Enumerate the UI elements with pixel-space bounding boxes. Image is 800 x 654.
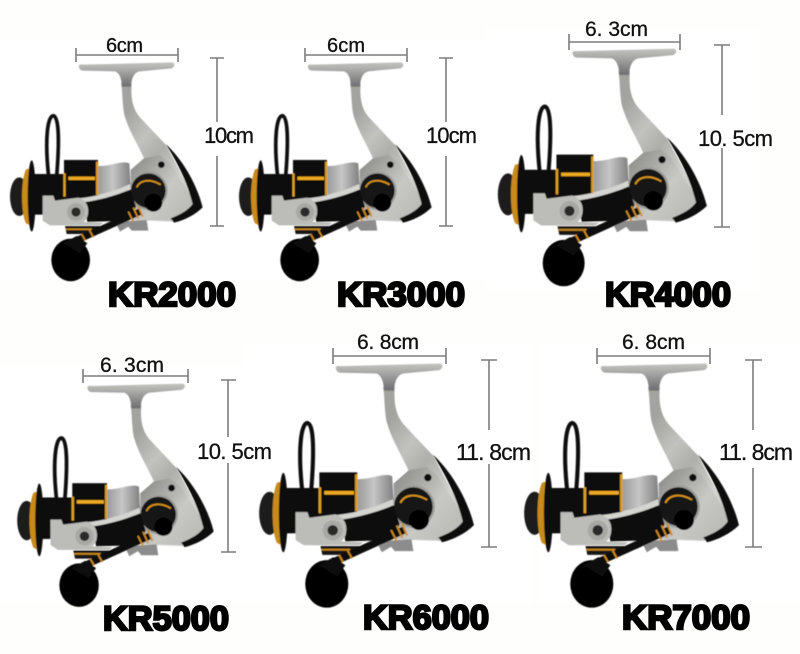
height dimension: KR3000: 10cm — [426, 123, 477, 148]
reel: KR6000 — [259, 363, 474, 608]
width dimension: KR6000: 6. 8cm — [357, 331, 419, 354]
panel: KR5000 — [17, 354, 272, 638]
height dimension: KR7000: 11. 8cm — [719, 439, 793, 465]
height dimension: KR4000: 10. 5cm — [698, 126, 773, 151]
model label: KR4000: KR4000 — [605, 276, 731, 314]
height dimension: KR3000 — [426, 58, 477, 226]
panel: KR6000 — [259, 331, 531, 637]
height dimension: KR5000: 10. 5cm — [197, 439, 272, 464]
model label: KR3000: KR3000 — [337, 276, 465, 314]
model label: KR2000: KR2000 — [108, 276, 236, 314]
model label: KR5000: KR5000 — [103, 600, 229, 638]
model label: KR6000: KR6000 — [363, 599, 489, 637]
height dimension: KR7000 — [719, 360, 793, 547]
panel: KR3000 — [239, 35, 477, 314]
panel: KR2000 — [10, 35, 254, 314]
panel: KR7000 — [524, 331, 793, 637]
width dimension: KR2000 — [76, 35, 178, 62]
width dimension: KR5000 — [83, 354, 188, 383]
height dimension: KR5000 — [197, 380, 272, 552]
height dimension: KR2000: 10cm — [204, 123, 254, 148]
height dimension: KR6000 — [456, 360, 531, 547]
width dimension: KR6000 — [333, 331, 446, 364]
reel: KR2000 — [10, 62, 203, 281]
model label: KR7000: KR7000 — [622, 599, 750, 637]
height dimension: KR6000: 11. 8cm — [456, 439, 531, 465]
width dimension: KR5000: 6. 3cm — [100, 354, 164, 377]
height dimension: KR4000 — [698, 45, 773, 227]
panel: KR4000 — [498, 18, 773, 314]
width dimension: KR3000: 6cm — [327, 35, 365, 57]
width dimension: KR4000: 6. 3cm — [585, 18, 648, 41]
width dimension: KR7000 — [597, 331, 710, 364]
reel: KR3000 — [239, 62, 432, 281]
reel: KR4000 — [498, 49, 707, 286]
reel: KR7000 — [524, 363, 739, 608]
width dimension: KR7000: 6. 8cm — [622, 331, 685, 354]
reel: KR5000 — [17, 384, 214, 607]
height dimension: KR2000 — [204, 58, 254, 226]
width dimension: KR2000: 6cm — [106, 35, 143, 57]
width dimension: KR4000 — [569, 18, 680, 50]
width dimension: KR3000 — [305, 35, 407, 62]
